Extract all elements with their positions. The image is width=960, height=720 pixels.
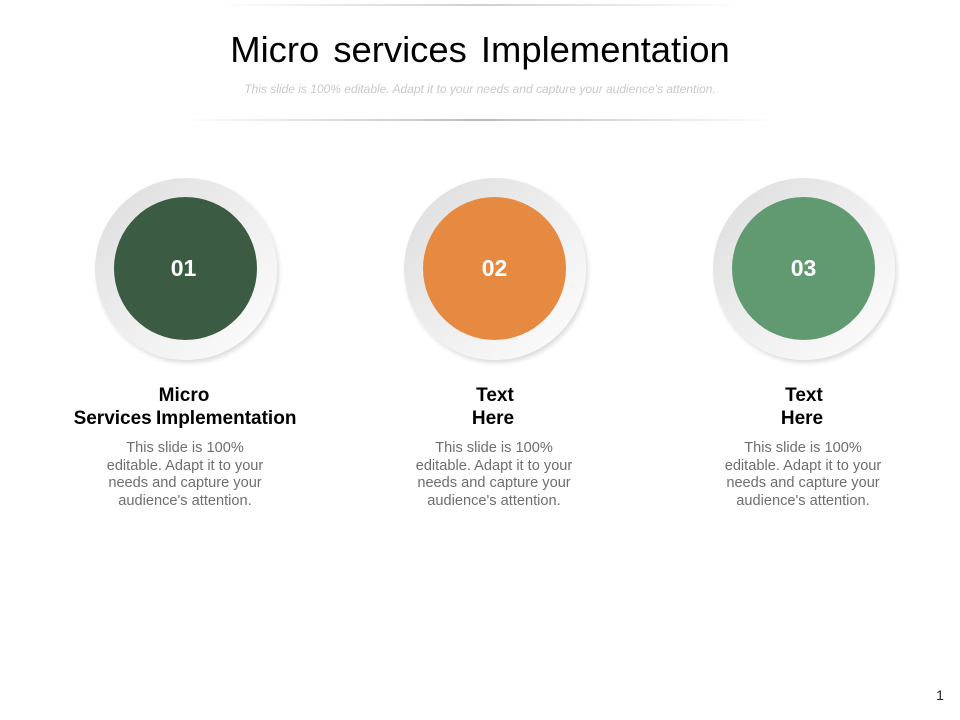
- subtitle: This slide is 100% editable. Adapt it to your needs and capture your audience's attention.: [244, 82, 716, 96]
- number disc 03: 03: [791, 255, 816, 281]
- heading 02: Text: [476, 385, 514, 406]
- outer ring 02: [404, 178, 586, 360]
- step 02 circle: [404, 178, 590, 364]
- description 03: This slide is 100%: [744, 440, 862, 456]
- title: Micro services Implementation: [230, 29, 730, 70]
- description 03: needs and capture your: [726, 475, 880, 491]
- description 02: audience's attention.: [427, 493, 561, 509]
- step 01 circle: [95, 178, 280, 364]
- outer ring 01: [95, 178, 277, 360]
- description 01: needs and capture your: [108, 475, 262, 491]
- description 03: [725, 440, 881, 509]
- heading 02: [472, 385, 514, 428]
- description 02: needs and capture your: [417, 475, 571, 491]
- description 01: This slide is 100%: [126, 440, 244, 456]
- heading 03: Text: [785, 385, 823, 406]
- description 01: editable. Adapt it to your: [107, 458, 263, 474]
- number disc 01: 01: [171, 255, 196, 281]
- text block 01: [74, 385, 296, 509]
- heading 03: [781, 385, 823, 428]
- heading 02: Here: [472, 408, 514, 428]
- number disc 03: [732, 197, 875, 340]
- number disc 01: [114, 197, 257, 340]
- text block 02: [416, 385, 572, 509]
- description 02: editable. Adapt it to your: [416, 458, 572, 474]
- description 01: [107, 440, 263, 509]
- heading 01: [74, 385, 296, 428]
- description 01: audience's attention.: [118, 493, 252, 509]
- heading 03: Here: [781, 408, 823, 428]
- heading 01: Micro: [159, 385, 209, 406]
- description 02: This slide is 100%: [435, 440, 553, 456]
- description 02: [416, 440, 572, 509]
- heading 01: Services Implementation: [74, 408, 296, 428]
- number disc 02: 02: [482, 255, 507, 281]
- step 03 circle: [713, 178, 898, 364]
- number disc 02: [423, 197, 566, 340]
- page number: 1: [936, 687, 944, 703]
- outer ring 03: [713, 178, 895, 360]
- description 03: editable. Adapt it to your: [725, 458, 881, 474]
- text block 03: [725, 385, 881, 509]
- description 03: audience's attention.: [736, 493, 870, 509]
